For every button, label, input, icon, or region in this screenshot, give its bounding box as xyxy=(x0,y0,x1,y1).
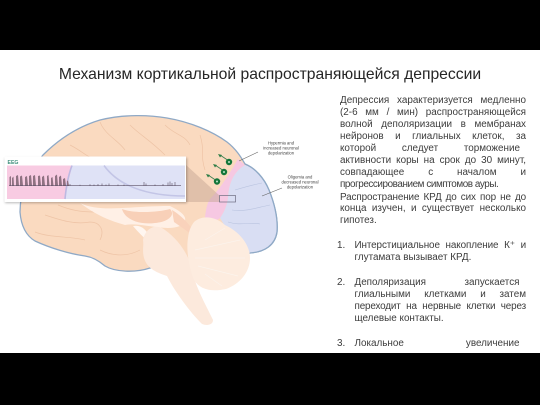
bottom black band xyxy=(0,353,540,405)
top black band xyxy=(0,0,540,50)
cerebrum outline xyxy=(20,116,277,271)
description paragraph: Распространение КРД до сих пор не до xyxy=(340,192,526,203)
hypothesis 2: глиальными клетками и затем xyxy=(354,289,526,300)
callout leader: hyperemia xyxy=(239,152,258,161)
callout leader: oligemia xyxy=(262,188,282,196)
hypothesis 3: 3. xyxy=(337,338,345,349)
description paragraph: прогрессированием симптомов ауры. xyxy=(340,179,498,190)
callout text: hyperemia: depolarization xyxy=(268,150,295,156)
pink hyperemia band xyxy=(205,159,245,221)
hypothesis 2: Деполяризация запускается xyxy=(354,277,520,288)
EEG label: EEG xyxy=(8,160,18,166)
description paragraph: совпадающее с началом и xyxy=(340,167,526,178)
callout text: oligemia: decreased neuronal xyxy=(281,180,319,184)
hypothesis 3: Локальное увеличение xyxy=(354,338,520,349)
EEG inset panel xyxy=(4,156,186,202)
hypothesis 2: щелевые контакты. xyxy=(354,313,444,324)
description paragraph: конца изучен, и существует несколько xyxy=(340,203,526,214)
callout text: oligemia xyxy=(281,174,319,190)
callout text: hyperemia xyxy=(263,140,299,156)
sulci xyxy=(35,122,205,255)
hypothesis 1 xyxy=(337,240,526,263)
hypothesis 2: 2. xyxy=(337,277,345,288)
deep structures xyxy=(80,203,185,228)
hypothesis list xyxy=(337,240,526,349)
blue oligemia region xyxy=(220,165,277,253)
description paragraph: (2-6 мм / мин) распространяющейся xyxy=(340,107,526,118)
description paragraph xyxy=(340,95,526,226)
hypothesis 1: глутамата вызывает КРД. xyxy=(354,252,471,263)
description paragraph: нейронов и глиальных клеток, за xyxy=(340,131,526,142)
blue sulci xyxy=(228,183,270,224)
description paragraph: которой следует торможение xyxy=(340,143,520,154)
callout text: oligemia: depolarization xyxy=(287,184,314,190)
hypothesis 2: переходит на нервные клетки через xyxy=(354,301,526,312)
description paragraph: волной деполяризации в мембранах xyxy=(340,119,526,130)
hypothesis 2 xyxy=(337,277,526,324)
description paragraph: активности коры на срок до 30 минут, xyxy=(340,155,526,166)
projection wedge from inset to cortex box xyxy=(186,165,220,202)
title: Механизм кортикальной распространяющейся депрессии xyxy=(59,66,481,83)
callout text: oligemia: Oligemia and xyxy=(288,174,313,180)
cerebellum xyxy=(187,217,250,290)
outer contour of posterior lobe xyxy=(245,164,277,253)
EEG inset panel shadow xyxy=(5,158,187,203)
hypothesis 1: 1. xyxy=(337,240,345,251)
EEG trace xyxy=(10,174,69,186)
hypothesis 1: Интерстициальное накопление К⁺ и xyxy=(354,240,526,251)
description paragraph: Депрессия характеризуется медленно xyxy=(340,95,526,106)
callout text: hyperemia: Hypermia and xyxy=(268,140,295,146)
cortex sample box xyxy=(220,196,236,202)
brainstem xyxy=(143,227,213,325)
ion efflux arrows xyxy=(206,154,232,185)
callout text: hyperemia: increased neuronal xyxy=(263,146,299,150)
description paragraph: гипотез. xyxy=(340,215,377,226)
